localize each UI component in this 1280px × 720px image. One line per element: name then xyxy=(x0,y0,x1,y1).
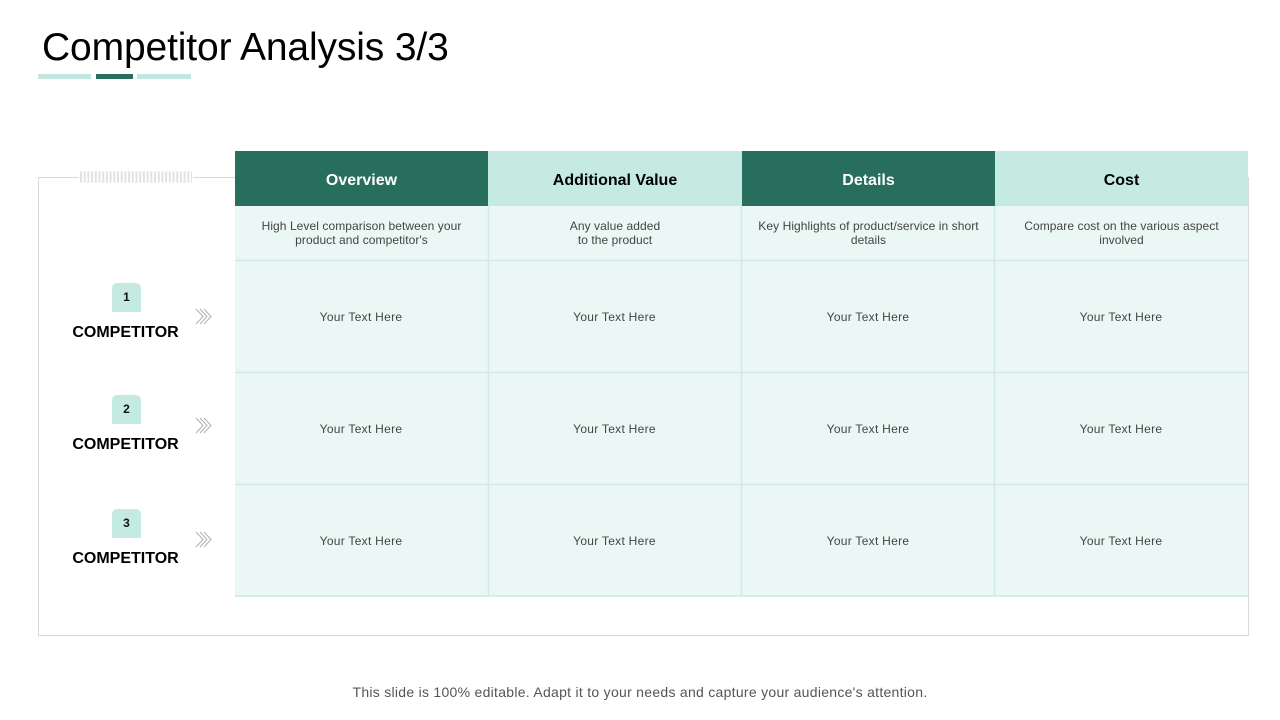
row 3 cell 4: Your Text Here xyxy=(1080,534,1162,548)
row 1 cell 2: Your Text Here xyxy=(573,310,656,324)
description: Cost: Compare cost on the various aspect xyxy=(1024,219,1219,233)
description: Details: Key Highlights of product/service in short xyxy=(758,219,979,233)
row 1 cell 1: Your Text Here xyxy=(320,310,402,324)
label: competitor 1: COMPETITOR xyxy=(72,324,179,341)
icon: chevrons row 2 xyxy=(196,418,212,434)
icon: chevrons row 3 xyxy=(196,532,212,548)
header: Cost xyxy=(995,151,1248,206)
row 1 cell 3: Your Text Here xyxy=(827,310,909,324)
header: Cost: Cost xyxy=(1104,172,1139,189)
header: Overview: Overview xyxy=(326,172,397,189)
badge 3 xyxy=(112,509,141,538)
description: Details xyxy=(758,219,979,247)
header: Additional Value: Additional Value xyxy=(553,172,677,189)
description: Overview: product and competitor's xyxy=(295,233,428,247)
title: Competitor Analysis 3/3 xyxy=(42,26,449,69)
header: Overview xyxy=(235,151,488,206)
icon: chevrons row 1 xyxy=(196,308,212,324)
title underline accent xyxy=(38,74,191,79)
row 3 cell 2: Your Text Here xyxy=(573,534,656,548)
description: Overview xyxy=(262,219,462,247)
header: Details xyxy=(742,151,995,206)
header: Details: Details xyxy=(842,172,895,189)
description: Additional Value: Any value added xyxy=(570,219,660,233)
row 2 cell 1: Your Text Here xyxy=(320,422,402,436)
description: Additional Value: to the product xyxy=(578,233,652,247)
panel: outer frame xyxy=(38,177,1249,636)
frame notch decoration xyxy=(79,171,193,183)
row 3 cell 3: Your Text Here xyxy=(827,534,909,548)
row 1 cell 4: Your Text Here xyxy=(1080,310,1162,324)
badge 2: 2 xyxy=(123,402,130,416)
badge 1: 1 xyxy=(123,290,130,304)
label: competitor 2: COMPETITOR xyxy=(72,436,179,453)
row 2 cell 2: Your Text Here xyxy=(573,422,656,436)
description: Additional Value xyxy=(570,219,660,247)
description: Overview: High Level comparison between your xyxy=(262,219,461,233)
badge 1 xyxy=(112,283,141,312)
table grid lines xyxy=(235,206,1248,597)
badge 2 xyxy=(112,395,141,424)
description: Details: details xyxy=(851,233,886,247)
description: Cost: involved xyxy=(1099,233,1144,247)
label: competitor 3: COMPETITOR xyxy=(72,550,179,567)
badge 3: 3 xyxy=(123,516,130,530)
description: Cost xyxy=(1024,219,1219,247)
footer note: This slide is 100% editable. Adapt it to your needs and capture your audience's attention. xyxy=(352,684,928,700)
row 3 cell 1: Your Text Here xyxy=(320,534,402,548)
header: Additional Value xyxy=(488,151,742,206)
row 2 cell 3: Your Text Here xyxy=(827,422,909,436)
row 2 cell 4: Your Text Here xyxy=(1080,422,1162,436)
table body background xyxy=(235,206,1248,597)
